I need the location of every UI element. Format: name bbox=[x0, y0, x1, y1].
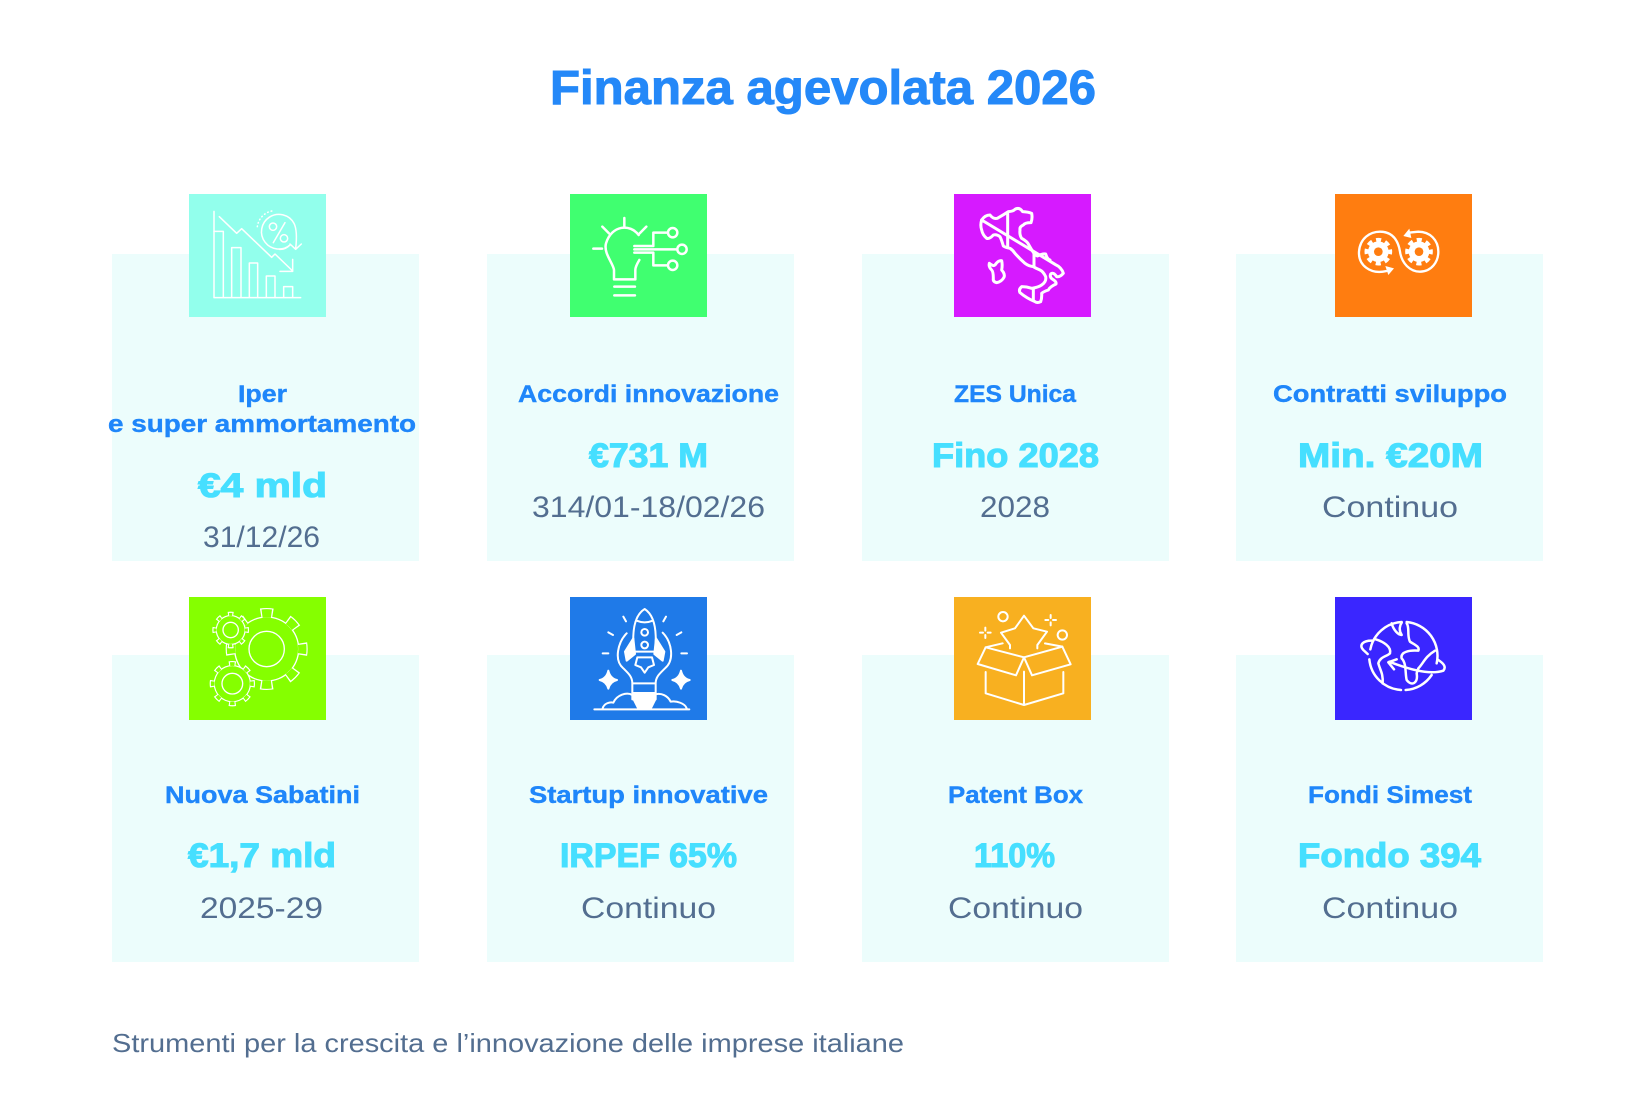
deadline: 31/12/26: 31/12/26 bbox=[203, 521, 320, 554]
panel: Accordi innovazione bbox=[487, 194, 794, 561]
value: Fino 2028: Fino 2028 bbox=[932, 437, 1099, 475]
icon: gears in infinity loop bbox=[1335, 194, 1472, 317]
deadline: 2025-29: 2025-29 bbox=[200, 892, 323, 925]
icon: declining bar chart with percent bbox=[189, 194, 326, 317]
value: €731 M: €731 M bbox=[589, 437, 708, 475]
value: 110%: 110% bbox=[974, 837, 1055, 875]
deadline: Continuo: Continuo bbox=[948, 892, 1083, 925]
deadline: Continuo: Continuo bbox=[581, 892, 716, 925]
value: Min. €20M: Min. €20M bbox=[1298, 437, 1483, 475]
panel: Nuova Sabatini bbox=[112, 597, 419, 962]
icon: light bulb with circuit bbox=[570, 194, 707, 317]
value: €4 mld: €4 mld bbox=[198, 467, 327, 505]
value: €1,7 mld: €1,7 mld bbox=[188, 837, 336, 875]
panel: Patent Box bbox=[862, 597, 1169, 962]
label: Fondi Simest: Fondi Simest bbox=[1308, 782, 1472, 809]
label: Nuova Sabatini: Nuova Sabatini bbox=[165, 782, 360, 809]
value: Fondo 394: Fondo 394 bbox=[1298, 837, 1481, 875]
icon: map of Italy bbox=[954, 194, 1091, 317]
label: ZES Unica: ZES Unica bbox=[954, 381, 1077, 408]
deadline: 2028: 2028 bbox=[980, 491, 1050, 524]
label: Iper e super ammortamento: e super ammortamento bbox=[108, 411, 416, 438]
label: Patent Box: Patent Box bbox=[948, 782, 1084, 809]
label: Iper e super ammortamento: Iper bbox=[238, 381, 287, 408]
panel: Fondi Simest bbox=[1236, 597, 1543, 962]
panel: Contratti sviluppo bbox=[1236, 194, 1543, 561]
label: Contratti sviluppo: Contratti sviluppo bbox=[1273, 381, 1507, 408]
panel: Iper e super ammortamento bbox=[108, 194, 419, 561]
icon: globe with orbit arrow bbox=[1335, 597, 1472, 720]
label: Startup innovative: Startup innovative bbox=[529, 782, 768, 809]
panel: ZES Unica bbox=[862, 194, 1169, 561]
icon: open box with star bbox=[954, 597, 1091, 720]
deadline: Continuo: Continuo bbox=[1322, 491, 1458, 524]
icon: three gears bbox=[189, 597, 326, 720]
title: Finanza agevolata 2026 bbox=[550, 62, 1096, 115]
value: IRPEF 65%: IRPEF 65% bbox=[560, 837, 737, 875]
icon: rocket in light bulb bbox=[570, 597, 707, 720]
panel: Startup innovative bbox=[487, 597, 794, 962]
footer note: Strumenti per la crescita e l’innovazione delle imprese italiane bbox=[112, 1028, 904, 1058]
deadline: 314/01-18/02/26: 314/01-18/02/26 bbox=[532, 491, 765, 524]
deadline: Continuo: Continuo bbox=[1322, 892, 1458, 925]
label: Iper e super ammortamento bbox=[108, 381, 416, 438]
label: Accordi innovazione: Accordi innovazione bbox=[518, 381, 779, 408]
